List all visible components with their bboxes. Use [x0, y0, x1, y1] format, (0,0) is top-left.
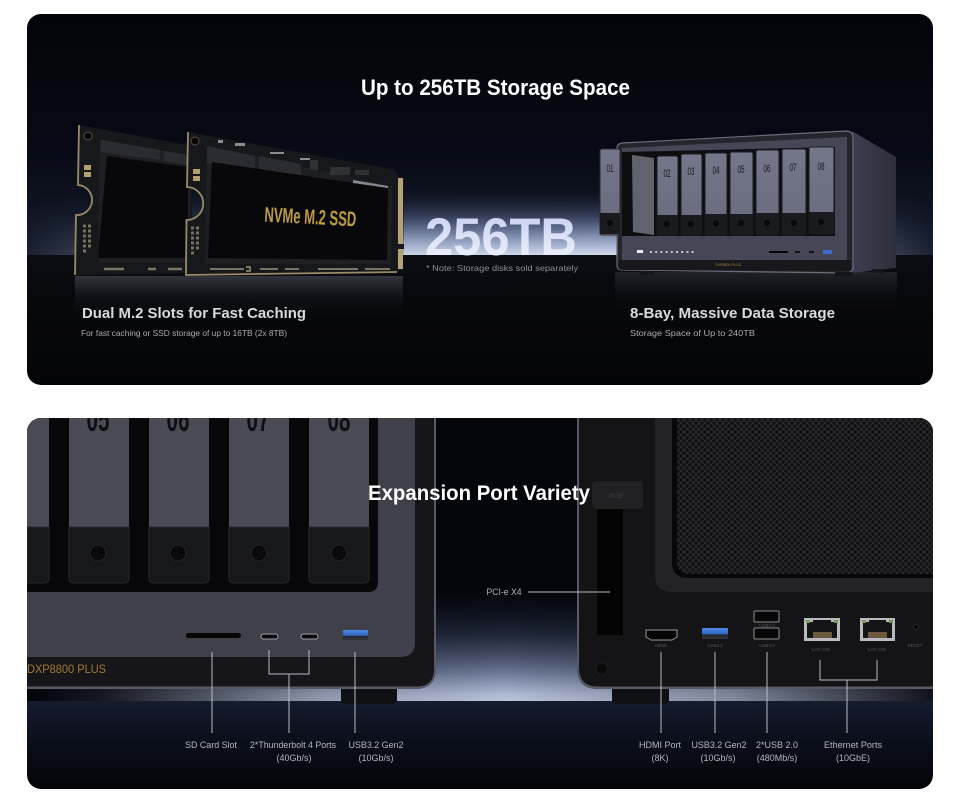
tray numbers: 06: [166, 401, 190, 439]
title: Up to 256TB Storage Space: [361, 75, 630, 100]
image: two NVMe M.2 SSDs: [75, 125, 404, 275]
image: 8-bay NAS: [600, 131, 896, 276]
tiny port captions: USB3.0: [759, 643, 775, 648]
tray numbers: [87, 418, 350, 432]
tray numbers: 05: [738, 164, 744, 176]
label: SD card: SD Card Slot: [185, 740, 237, 750]
fan grille: [655, 418, 933, 592]
front SSD: [186, 132, 404, 275]
icon: USB port: [343, 630, 368, 640]
M.2 description: For fast caching or SSD storage of up to 16TB (2x 8TB): [81, 328, 287, 338]
SSD label: NVMe M.2 SSD: [264, 204, 357, 231]
screw: [596, 663, 608, 675]
tiny port captions: USB2.0: [759, 623, 775, 628]
back SSD: [75, 125, 192, 275]
reset button: [914, 624, 918, 630]
label: Thunderbolt speed: (40Gb/s): [276, 753, 312, 763]
tray numbers: 02: [664, 168, 670, 180]
label: USB 2.0: 2*USB 2.0: [756, 740, 798, 750]
NAS front ports: [637, 250, 832, 254]
tray numbers: 07: [790, 162, 796, 174]
tiny port captions: HDMI: [655, 643, 667, 648]
label: rear USB speed: (10Gb/s): [700, 753, 736, 763]
title: Expansion Port Variety: [368, 482, 590, 505]
panel: ports: [27, 401, 933, 789]
front plate: [27, 418, 415, 657]
NAS description: Storage Space of Up to 240TB: [630, 328, 755, 338]
leader lines: [212, 592, 877, 733]
NAS model label: DXP8800 PLUS: [715, 262, 741, 267]
icon: SD card slot: [186, 633, 241, 638]
NAS side: [852, 131, 896, 273]
tiny port captions: LAN 10G: [812, 647, 831, 652]
label: front USB speed: (10Gb/s): [358, 753, 394, 763]
label: HDMI resolution: (8K): [651, 753, 669, 763]
label: Thunderbolt: 2*Thunderbolt 4 Ports: [250, 740, 336, 750]
label: front USB: USB3.2 Gen2: [348, 740, 404, 750]
rear view of NAS: [577, 418, 933, 704]
trays: [27, 418, 369, 527]
tray numbers: 08: [328, 401, 350, 439]
tiny port captions: LAN 10G: [868, 647, 887, 652]
NAS front: [617, 131, 853, 273]
feet: [640, 269, 884, 276]
tray numbers: 08: [818, 161, 824, 173]
panel: storage: [27, 14, 933, 385]
tiny port captions: USB3.2: [707, 643, 723, 648]
port labels: [185, 587, 883, 763]
capacity figure: 256TB: [425, 208, 577, 267]
icon: HDMI port: [646, 630, 677, 640]
drive trays: [600, 147, 834, 235]
icon: Thunderbolt ports: [261, 634, 318, 639]
label: rear USB: USB3.2 Gen2: [692, 740, 746, 750]
icon: USB 2.0 ports: [754, 611, 779, 639]
tiny port captions: [655, 623, 923, 652]
chassis: [27, 418, 436, 689]
tray numbers: 05: [86, 401, 110, 439]
tray knobs: [90, 545, 347, 561]
open bay with drive: [632, 155, 654, 235]
tray numbers: 03: [688, 166, 694, 178]
tiny port captions: RESET: [907, 643, 923, 648]
icon: LAN port 1: [804, 618, 840, 641]
label: USB 2.0 speed: (480Mb/s): [757, 753, 797, 763]
icon: USB 3.2 port: [702, 628, 728, 639]
storage note: * Note: Storage disks sold separately: [426, 263, 579, 273]
front view of NAS: [27, 401, 436, 704]
label: Ethernet: Ethernet Ports: [824, 740, 883, 750]
panel 1 background: [27, 14, 933, 385]
bay frame: [27, 418, 378, 592]
model label: DXP8800 PLUS: [27, 664, 106, 676]
label: Ethernet speed: (10GbE): [836, 753, 870, 763]
PCIe bracket: [592, 481, 643, 635]
icon: LAN port 2: [860, 618, 895, 641]
label: HDMI: HDMI Port: [639, 740, 681, 750]
panel 2 background: [27, 418, 933, 789]
tray numbers: 04: [712, 165, 720, 177]
tray numbers: 01: [606, 163, 614, 175]
tray numbers: [606, 162, 824, 177]
label: PCI-e: PCI-e X4: [486, 587, 522, 597]
feet: [341, 689, 397, 704]
NAS heading: 8-Bay, Massive Data Storage: [630, 305, 835, 322]
tray numbers: 07: [246, 401, 270, 439]
tray numbers: 06: [764, 163, 770, 175]
M.2 heading: Dual M.2 Slots for Fast Caching: [82, 305, 306, 322]
PCIe bracket: PCIE: [609, 494, 623, 500]
